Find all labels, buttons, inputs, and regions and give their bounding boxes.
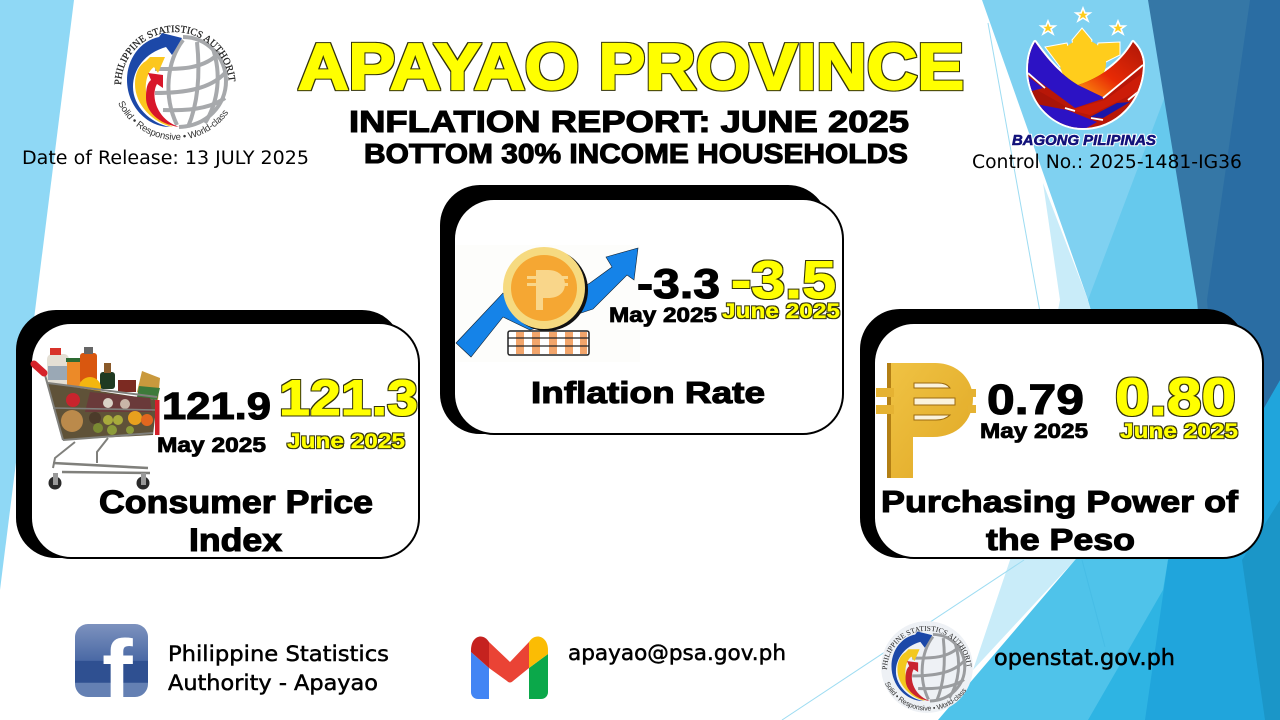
logo: small PSA seal: PHILIPPINE STATISTICS AUTHORITY xyxy=(882,626,972,670)
heading line 2: Index xyxy=(189,522,282,558)
may label: May 2025 xyxy=(157,434,266,457)
logo: Philippine Statistics Authority xyxy=(114,25,236,140)
logo: Bagong Pilipinas: BAGONG PILIPINAS xyxy=(1012,133,1156,149)
june label: June 2025 xyxy=(287,430,405,453)
june value: 121.3 xyxy=(279,370,418,426)
logo: small PSA seal: Solid • Responsive • World-class xyxy=(885,682,966,711)
logo: Bagong Pilipinas xyxy=(1012,8,1156,149)
june value: 0.80 xyxy=(1115,368,1236,427)
date of release: Date of Release: 13 JULY 2025 xyxy=(22,148,309,169)
icon: peso coin with rising arrow xyxy=(456,245,640,362)
may value: 121.9 xyxy=(162,386,271,428)
icon: facebook xyxy=(75,624,148,697)
logo: Philippine Statistics Authority: Solid • Responsive • World-class xyxy=(118,101,228,140)
facebook name xyxy=(168,642,389,696)
june label: June 2025 xyxy=(1120,420,1238,443)
may label: May 2025 xyxy=(609,304,717,327)
heading line 2: the Peso xyxy=(986,522,1135,557)
panel: consumer price index xyxy=(16,310,419,558)
heading: Inflation Rate xyxy=(531,375,765,410)
website: openstat.gov.ph xyxy=(994,646,1175,671)
control number: Control No.: 2025-1481-IG36 xyxy=(972,152,1242,173)
heading line 1: Consumer Price xyxy=(99,484,373,520)
june label: June 2025 xyxy=(722,300,840,323)
logo: Philippine Statistics Authority: PHILIPPINE STATISTICS AUTHORITY xyxy=(114,25,236,85)
heading line 1: Purchasing Power of xyxy=(881,484,1239,519)
june value: -3.5 xyxy=(731,251,836,310)
logo: small PSA seal xyxy=(881,621,973,713)
background: right blue facets xyxy=(782,0,1280,720)
facebook name: Authority - Apayao xyxy=(168,671,378,696)
may label: May 2025 xyxy=(980,420,1088,443)
icon: grocery cart xyxy=(34,347,160,490)
icon: gmail xyxy=(471,636,548,699)
title: APAYAO PROVINCE xyxy=(298,30,964,103)
panel: inflation rate xyxy=(440,185,843,434)
may value: -3.3 xyxy=(637,260,720,307)
logo: Bagong Pilipinas: BAGONG PILIPINAS xyxy=(1012,133,1156,149)
may value: 0.79 xyxy=(987,376,1084,424)
background: left blue wedge xyxy=(0,0,74,590)
icon: gold peso sign xyxy=(876,363,976,478)
panel: purchasing power of the peso xyxy=(860,309,1263,558)
subtitle: report month: INFLATION REPORT: JUNE 2025 xyxy=(349,104,909,139)
facebook name: Philippine Statistics xyxy=(168,642,389,667)
subtitle: income group: BOTTOM 30% INCOME HOUSEHOLDS xyxy=(364,138,908,169)
email address: apayao@psa.gov.ph xyxy=(568,641,786,666)
